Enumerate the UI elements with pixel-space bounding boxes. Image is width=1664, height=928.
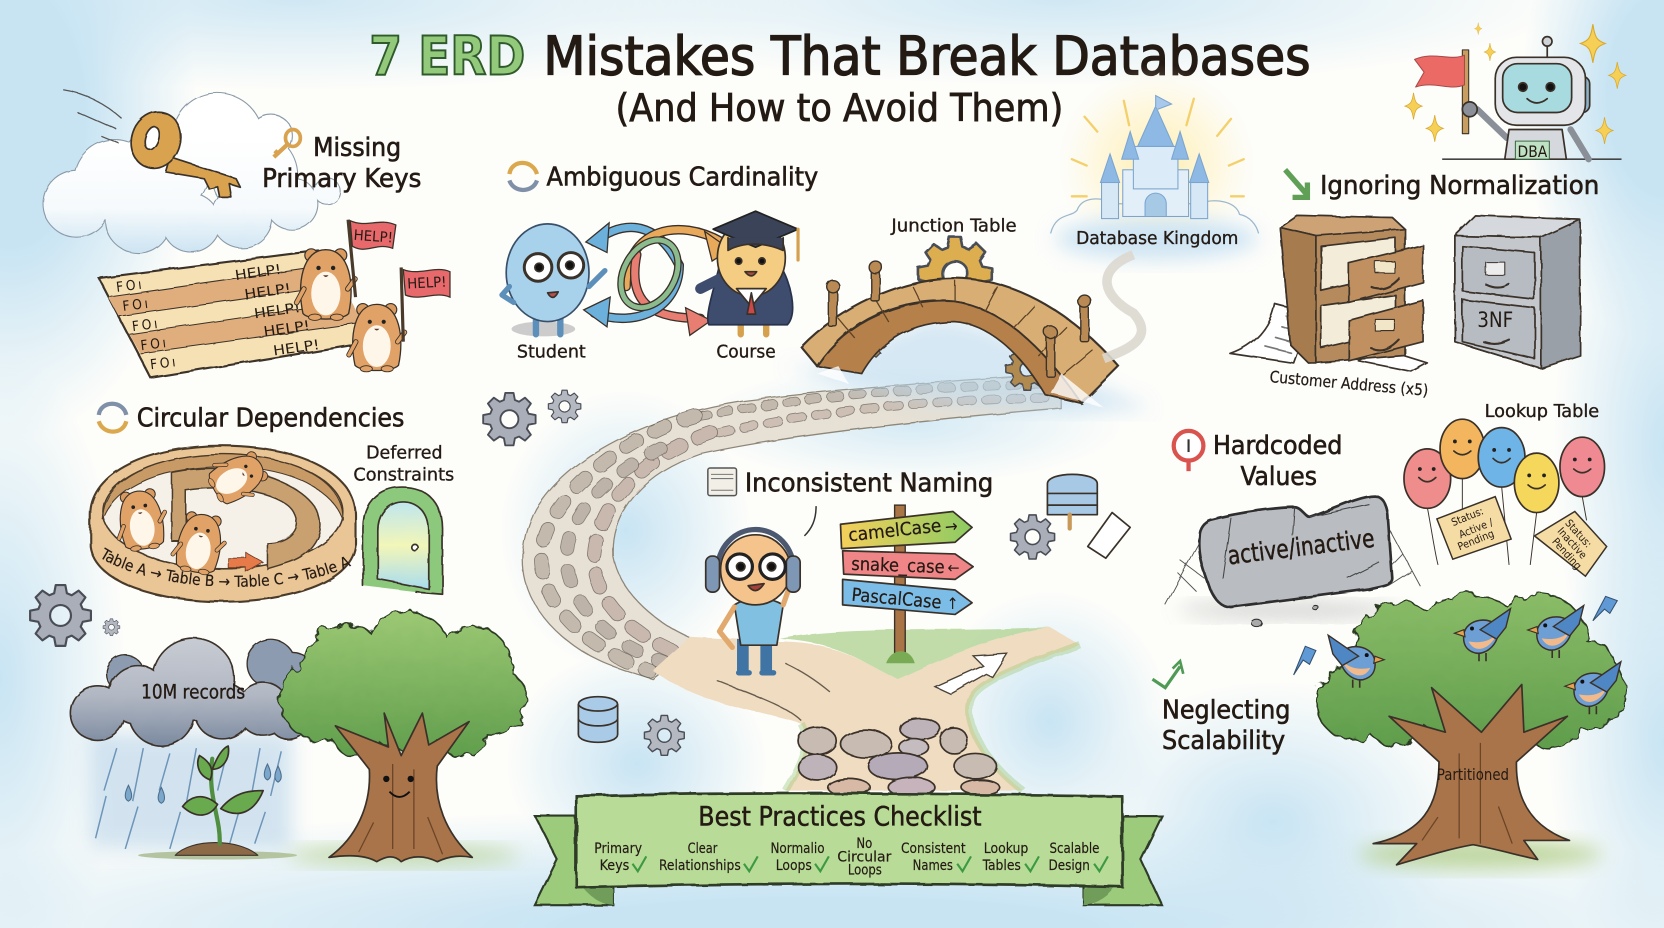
item: no circular loops: No: [856, 836, 872, 852]
robot mascot: [1405, 23, 1626, 161]
castle with glow: [1051, 64, 1259, 265]
hamsters in loop: [113, 444, 273, 577]
item: scalable design: Design: [1048, 858, 1090, 874]
label: 10M records: 10M records: [141, 680, 245, 703]
checklist items: [594, 836, 1108, 878]
label: deferred constraints: [353, 442, 454, 486]
sign: PascalCase: [843, 579, 972, 614]
heading: ignoring normalization: Ignoring Normalization: [1320, 171, 1599, 201]
smiling tree: [281, 612, 525, 865]
row labels: FOı: [122, 296, 149, 315]
row labels: FOı: [115, 277, 143, 296]
heading: neglecting scalability: Neglecting: [1162, 695, 1290, 725]
item: clear relationships: Relationships: [659, 858, 741, 874]
item: scalable design: Scalable: [1050, 841, 1099, 857]
label: 3NF: 3NF: [1477, 308, 1513, 333]
heading: neglecting scalability: Scalability: [1162, 726, 1285, 756]
table of rows with help labels: [99, 250, 374, 378]
speech mark: [804, 506, 816, 536]
decorative gears and icons left: [30, 390, 1055, 755]
sand fork road: [653, 627, 1079, 797]
item: primary keys: [594, 841, 646, 874]
status tags: Pending: [1549, 535, 1584, 572]
panel: neglecting scalability storm: [71, 612, 525, 865]
item: normalio loops: Normalio: [770, 841, 825, 857]
item: no circular loops: Circular: [837, 850, 892, 866]
character: student: [502, 224, 605, 336]
panel: circular dependencies: [88, 402, 454, 604]
status tags: Inactive: [1555, 525, 1590, 562]
row labels: FOı: [140, 335, 167, 354]
item: lookup tables: Tables: [982, 858, 1021, 874]
title: (And How to Avoid Them): [616, 87, 1063, 131]
row labels: [115, 262, 321, 373]
row labels: HELP!: [234, 262, 282, 284]
ribbon: [535, 793, 1162, 905]
sign: camelCase: [840, 511, 972, 549]
item: primary keys: Primary: [594, 841, 642, 857]
label: course: Course: [716, 342, 776, 363]
item: scalable design: [1048, 841, 1108, 874]
panel: neglecting scalability right: [1152, 594, 1625, 869]
hamsters with help flags: HELP!: [353, 228, 393, 247]
banner: best practices checklist: [535, 793, 1162, 905]
heading: inconsistent naming: Inconsistent Naming: [745, 468, 993, 498]
row labels: FOı: [131, 316, 158, 335]
status tags: Status:: [1449, 504, 1485, 529]
item: consistent names: Names: [913, 858, 953, 874]
heading: hardcoded values: Hardcoded: [1213, 431, 1342, 461]
row labels: HELP!: [263, 318, 311, 340]
item: normalio loops: Loops: [776, 858, 812, 874]
row labels: FOı: [149, 354, 176, 373]
sign: PascalCase: PascalCase: [851, 585, 942, 613]
robot mascot: DBA: [1518, 142, 1547, 161]
grey filing cabinet: [1455, 215, 1580, 368]
circular maze: [90, 446, 356, 602]
storm cloud: [71, 639, 313, 745]
sign: PascalCase: ↑: [947, 594, 959, 613]
panel: ignoring normalization: [1230, 170, 1599, 400]
status tags: Status:: [1562, 517, 1595, 550]
heading: hardcoded values: Values: [1241, 462, 1317, 492]
sign: camelCase: →: [944, 516, 959, 538]
label: junction table: Junction Table: [890, 215, 1017, 236]
label: customer address: Customer Address (x5): [1269, 367, 1429, 400]
character: course with graduation cap: [700, 211, 798, 334]
row labels: HELP!: [272, 337, 321, 359]
hamsters with help flags: [297, 220, 450, 372]
panel: inconsistent naming: [706, 468, 1130, 673]
item: clear relationships: [659, 841, 758, 874]
label: partitioned: Partitioned: [1437, 765, 1509, 784]
hamsters with help flags: HELP!: [407, 275, 447, 293]
heading: ambiguous cardinality: Ambiguous Cardinality: [547, 163, 818, 193]
item: primary keys: Keys: [600, 858, 630, 874]
partitioned tree: [1294, 594, 1625, 869]
developer with headphones: [706, 530, 800, 673]
label: active/inactive: active/inactive: [1226, 524, 1376, 571]
cracked stone: [1165, 496, 1420, 627]
bridge: [780, 237, 1151, 412]
label: student: Student: [517, 342, 586, 363]
server icon: [1047, 474, 1130, 558]
item: consistent names: [901, 841, 971, 874]
label: database kingdom: Database Kingdom: [1076, 228, 1238, 249]
panel: ambiguous cardinality: [502, 163, 818, 363]
sign: snake_case: ←: [948, 558, 960, 577]
title: 7 ERD: [369, 25, 525, 87]
heading: missing primary keys: [262, 129, 421, 194]
status tags: [1437, 497, 1607, 576]
status tags: Active /: [1457, 515, 1496, 541]
label: lookup table: Lookup Table: [1485, 401, 1599, 422]
curved table loop label: Table A → Table B → Table C → Table A: [102, 547, 352, 587]
rain: [90, 732, 292, 849]
title: Mistakes That Break Databases: [543, 25, 1311, 87]
winding path to castle: [1104, 255, 1142, 359]
heading: missing primary keys: Primary Keys: [262, 164, 421, 194]
item: lookup tables: [982, 841, 1039, 874]
panel: database kingdom: [1051, 64, 1259, 359]
cobblestone path: [523, 374, 1061, 679]
item: clear relationships: Clear: [688, 841, 718, 857]
item: lookup tables: Lookup: [984, 841, 1028, 857]
row labels: HELP!: [253, 300, 302, 322]
item: no circular loops: Loops: [848, 862, 882, 878]
status tags: Pending: [1456, 527, 1496, 553]
heading: missing primary keys: Missing: [313, 133, 401, 163]
heading: hardcoded values: [1174, 431, 1342, 492]
label: deferred constraints: Deferred: [366, 442, 443, 463]
smiling balloons: [1404, 419, 1605, 565]
item: consistent names: Consistent: [901, 841, 966, 857]
item: no circular loops: [837, 836, 892, 878]
papers: [1230, 303, 1427, 371]
title: [369, 25, 1311, 131]
heading: neglecting scalability: [1152, 661, 1290, 756]
panel: missing primary keys: [44, 90, 450, 378]
green door: [363, 487, 443, 594]
panel: hardcoded values: [1165, 401, 1607, 627]
panel: junction table bridge: [780, 215, 1151, 412]
brown filing cabinet: [1280, 215, 1423, 363]
checklist title: Best Practices Checklist: [698, 802, 982, 833]
signpost: [840, 505, 973, 663]
sign: snake_case: [843, 551, 973, 579]
tangled relationship arrows: [584, 223, 730, 335]
label: deferred constraints: Constraints: [353, 465, 454, 486]
sign: snake_case: snake_case: [851, 554, 945, 578]
row labels: HELP!: [243, 281, 292, 303]
cloud with key: [44, 90, 340, 253]
item: normalio loops: [770, 841, 829, 874]
heading: circular dependencies: Circular Dependencies: [137, 404, 404, 434]
sign: camelCase: camelCase: [847, 516, 942, 546]
seedling: [138, 746, 297, 860]
